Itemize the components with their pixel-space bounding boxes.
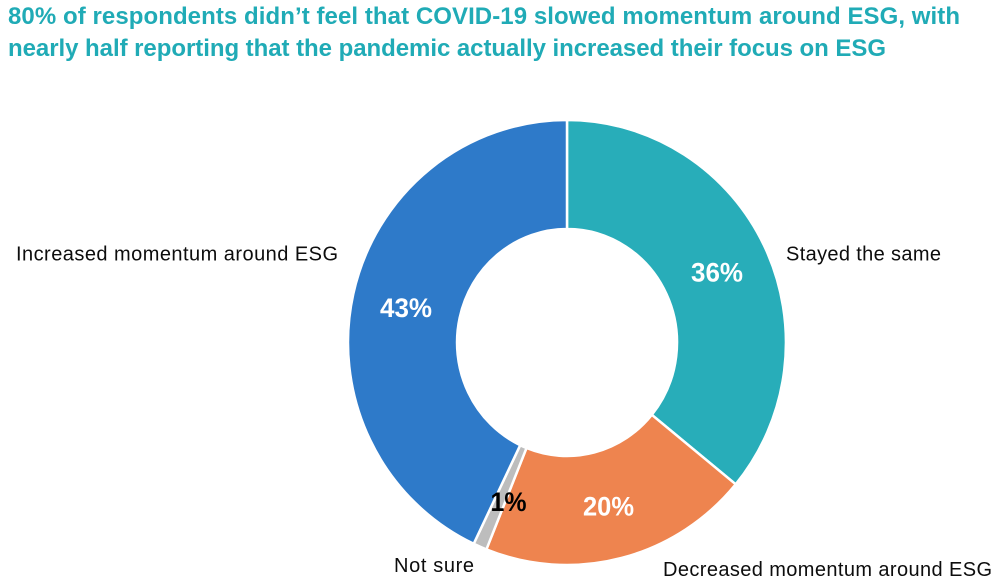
donut chart bbox=[348, 120, 786, 565]
segment: decreased momentum 20% bbox=[486, 415, 736, 565]
category label: stayed the same: Stayed the same bbox=[786, 244, 941, 266]
title bbox=[8, 3, 960, 62]
value label: 1%: 1% bbox=[490, 487, 526, 517]
value label: 36%: 36% bbox=[691, 258, 743, 288]
segment: increased momentum 43% bbox=[348, 120, 567, 544]
title: nearly half reporting that the pandemic actually increased their focus on ESG bbox=[8, 35, 886, 62]
value label: 43%: 43% bbox=[380, 293, 432, 323]
category label: not sure: Not sure bbox=[394, 555, 474, 577]
segment: stayed the same 36% bbox=[567, 120, 786, 484]
category label: decreased momentum: Decreased momentum around ESG bbox=[663, 559, 992, 581]
category label: increased momentum: Increased momentum around ESG bbox=[16, 244, 338, 266]
segment: not sure 1% bbox=[474, 445, 526, 549]
title: 80% of respondents didn’t feel that COVID-19 slowed momentum around ESG, with bbox=[8, 3, 960, 30]
value label: 20%: 20% bbox=[583, 492, 634, 522]
